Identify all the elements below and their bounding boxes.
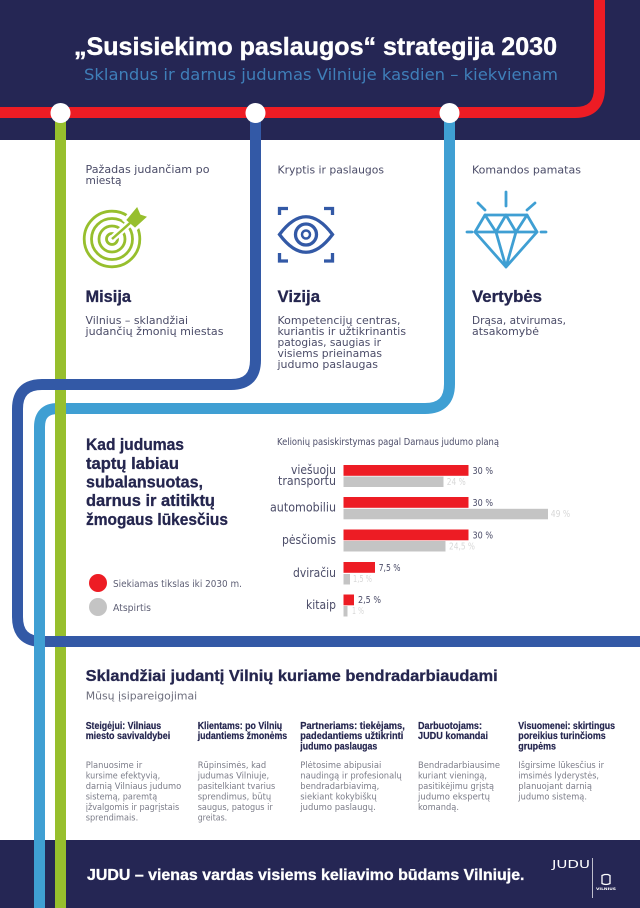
baseline values: 1,5 % — [353, 574, 372, 585]
vision text: kuriantis ir užtikrinantis — [278, 325, 406, 338]
target values: 30 % — [472, 466, 493, 477]
employees text: Bendradarbiausime — [418, 761, 500, 771]
legend — [89, 574, 242, 616]
clients heading: Klientams: po Vilnių — [198, 721, 282, 732]
vision lead text: Kryptis ir paslaugos — [278, 164, 384, 176]
society heading: Visuomenei: skirtingus — [518, 721, 615, 732]
values text: Drąsa, atvirumas, — [472, 314, 566, 327]
employees text: pasitikėjimu grįstą — [418, 782, 494, 792]
society heading: grupėms — [518, 742, 557, 752]
clients text: pasitelkiant tvarius — [198, 782, 275, 792]
clients text: sprendimus, būtų — [198, 792, 271, 802]
society text: planuojant darnią — [518, 782, 592, 792]
founder heading: Steigėjui: Vilniaus — [86, 721, 162, 732]
column: employees — [417, 721, 500, 813]
mission heading: Misija — [86, 287, 132, 306]
subtitle: Sklandus ir darnus judumas Vilniuje kasdien – kiekvienam — [84, 65, 558, 84]
target values: 30 % — [472, 530, 493, 542]
baseline values: 49 % — [551, 509, 570, 520]
mission lead text — [86, 163, 210, 187]
society text — [517, 760, 604, 802]
clients text — [197, 761, 275, 824]
target values — [358, 466, 493, 606]
partners heading: judumo paslaugas — [299, 742, 378, 752]
mission text — [84, 314, 224, 338]
mission lead text: Pažadas judančiam po — [86, 163, 210, 176]
mission text: Vilnius – sklandžiai — [86, 314, 188, 327]
row labels: viešuoju — [291, 463, 336, 477]
founder heading — [86, 721, 170, 742]
founder text: kursime efektyvią, — [86, 772, 160, 782]
baseline values: 1 % — [352, 606, 364, 617]
partners heading: padedantiems užtikrinti — [300, 731, 404, 742]
founder text — [86, 761, 182, 824]
mission text: judančių žmonių miestas — [84, 325, 224, 338]
footer slogan: JUDU – vienas vardas visiems keliavimo būdams Vilniuje. — [87, 867, 524, 884]
partners text: naudingą ir profesionalų — [300, 772, 402, 782]
founder text: darnią Vilniaus judumo — [86, 782, 182, 792]
employees text: judumo ekspertų — [417, 792, 490, 802]
society heading — [518, 721, 615, 752]
target bars — [344, 465, 468, 605]
balance heading — [86, 436, 228, 529]
bar chart: trip distribution — [270, 437, 570, 617]
row labels — [270, 463, 336, 612]
clients heading — [197, 721, 288, 742]
vision text: judumo paslaugas — [277, 358, 378, 371]
row labels: pėsčiomis — [282, 533, 336, 547]
founder text: įžvalgomis ir pagrįstais — [86, 803, 179, 813]
vision text: visiems prieinamas — [278, 347, 382, 360]
clients text: Rūpinsimės, kad — [198, 761, 266, 771]
column: partners — [299, 721, 405, 813]
legend: Siekiamas tikslas iki 2030 m. — [113, 579, 242, 590]
values text — [472, 314, 566, 338]
values heading: Vertybės — [472, 287, 542, 306]
founder heading: miesto savivaldybei — [86, 731, 170, 742]
clients text: judumas Vilniuje, — [197, 772, 269, 782]
vision text — [277, 314, 406, 371]
balance heading: Kad judumas — [86, 436, 184, 454]
baseline values — [352, 477, 570, 617]
society text: judumo sistemą. — [517, 792, 587, 802]
logo: Vilnius emblem: VILNIUS — [596, 886, 616, 891]
clients text: saugus, patogus ir — [198, 803, 273, 813]
chart title: Kelionių pasiskirstymas pagal Darnaus judumo planą — [277, 437, 499, 448]
values lead text: Komandos pamatas — [472, 164, 581, 176]
founder text: sprendimais. — [86, 814, 138, 824]
header band — [0, 0, 640, 140]
society text: imsimės lyderystės, — [518, 772, 599, 782]
panel: mission — [84, 163, 224, 338]
founder text: Planuosime ir — [86, 761, 142, 771]
row labels: automobiliu — [270, 500, 336, 514]
station nodes — [50, 103, 460, 123]
mission lead text: miestą — [86, 174, 122, 187]
employees heading — [418, 721, 488, 742]
employees text: kuriant vieningą, — [418, 772, 487, 782]
vision heading: Vizija — [278, 287, 321, 306]
employees heading: Darbuotojams: — [418, 721, 482, 732]
commitments subheading: Mūsų įsipareigojimai — [86, 690, 197, 702]
row labels: dviračiu — [293, 566, 336, 580]
employees text — [417, 761, 500, 813]
column: clients — [197, 721, 288, 824]
balance heading: žmogaus lūkesčius — [86, 511, 228, 529]
panel: values — [467, 164, 581, 338]
balance heading: subalansuotas, — [86, 474, 203, 492]
employees heading: JUDU komandai — [418, 731, 488, 742]
partners text: bendradarbiavimą, — [300, 782, 379, 792]
target values: 2,5 % — [358, 595, 381, 606]
partners text: judumo paslaugų. — [299, 803, 376, 813]
logo: JUDU wordmark: JUDU — [551, 859, 590, 871]
partners text: Plėtosime abipusiai — [300, 761, 381, 771]
row labels: transportu — [278, 474, 336, 488]
balance heading: darnus ir atitiktų — [86, 492, 215, 510]
employees text: komandą. — [418, 803, 459, 813]
baseline bars — [344, 476, 548, 616]
target values: 30 % — [472, 498, 493, 509]
society heading: poreikius turinčioms — [518, 731, 606, 742]
baseline values: 24 % — [447, 477, 466, 488]
society text: Išgirsime lūkesčius ir — [518, 760, 604, 771]
icon: eye in frame — [280, 208, 332, 261]
icon: target with arrow — [84, 208, 146, 267]
column: founder — [86, 721, 182, 824]
values text: atsakomybė — [472, 325, 539, 338]
title: „Susisiekimo paslaugos“ strategija 2030 — [74, 33, 557, 61]
icon: diamond — [467, 192, 546, 267]
partners text — [299, 761, 402, 813]
partners heading: Partneriams: tiekėjams, — [300, 721, 405, 732]
vision text: patogias, saugias ir — [278, 336, 381, 349]
commitments heading: Sklandžiai judantį Vilnių kuriame bendradarbiaudami — [86, 668, 498, 685]
balance heading: taptų labiau — [86, 455, 179, 473]
founder text: sistemą, paremtą — [86, 792, 158, 802]
target values: 7,5 % — [379, 563, 400, 574]
row labels: kitaip — [306, 598, 336, 612]
footer logos — [551, 858, 616, 898]
baseline values: 24,5 % — [449, 542, 475, 552]
footer band — [0, 840, 640, 908]
panel: vision — [277, 164, 406, 371]
legend: Atspirtis — [113, 603, 151, 614]
clients text: greitas. — [198, 814, 227, 824]
partners text: siekiant kokybiškų — [300, 792, 377, 802]
partners heading — [299, 721, 405, 752]
vision text: Kompetencijų centras, — [278, 314, 400, 327]
column: society — [517, 721, 615, 802]
clients heading: judantiems žmonėms — [197, 731, 288, 742]
